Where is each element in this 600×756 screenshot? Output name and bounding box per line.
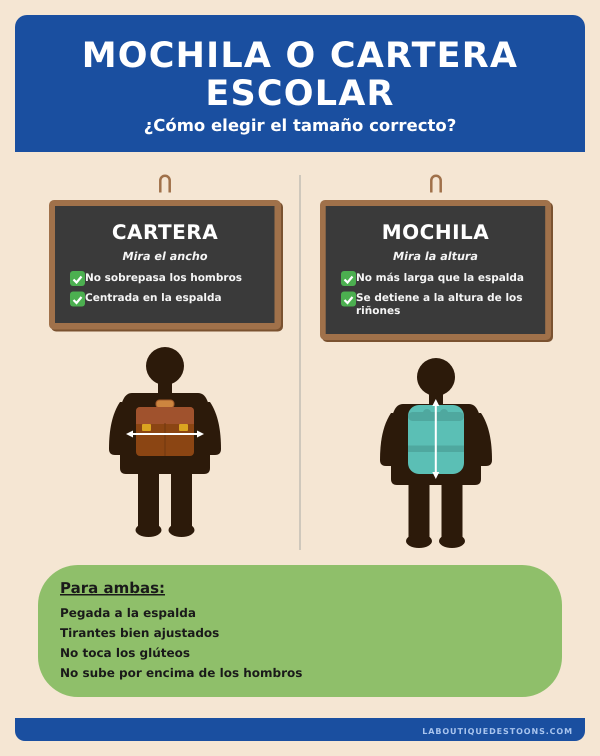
board heading: MOCHILA <box>382 220 489 244</box>
chalkboard: cartera <box>49 200 283 332</box>
checklist item: No sobrepasa los hombros <box>85 272 242 284</box>
icon: board hook <box>160 176 170 192</box>
footer credit: LABOUTIQUEDESTOONS.COM <box>422 727 573 736</box>
chalkboard: mochila <box>320 200 553 342</box>
icon: briefcase <box>136 400 194 456</box>
checklist item: riñones <box>356 305 400 317</box>
figure with backpack <box>380 358 492 548</box>
checklist item <box>341 292 523 317</box>
panel: mochila <box>320 176 553 548</box>
arrow: width <box>126 430 204 438</box>
board subheading: Mira el ancho <box>122 250 208 263</box>
title: ESCOLAR <box>205 74 395 114</box>
list of tips: Tirantes bien ajustados <box>60 626 219 640</box>
checklist item: Se detiene a la altura de los <box>356 292 523 304</box>
panel: cartera <box>49 176 283 537</box>
board heading: CARTERA <box>112 220 218 244</box>
list of tips: No sube por encima de los hombros <box>60 666 302 680</box>
board subheading: Mira la altura <box>393 250 478 263</box>
panel heading: Para ambas: <box>60 579 165 597</box>
arrow: height <box>432 399 439 479</box>
figure with briefcase <box>109 347 221 537</box>
list of tips: Pegada a la espalda <box>60 606 196 620</box>
subtitle: ¿Cómo elegir el tamaño correcto? <box>144 116 456 135</box>
list of tips: No toca los glúteos <box>60 646 190 660</box>
list of tips <box>60 606 302 680</box>
title: MOCHILA O CARTERA <box>82 36 518 76</box>
footer bar <box>15 718 585 741</box>
panel: para ambas <box>38 565 562 697</box>
title <box>82 36 518 114</box>
icon: backpack <box>408 405 464 474</box>
checklist item: Centrada en la espalda <box>85 292 222 304</box>
checklist item: No más larga que la espalda <box>356 272 524 284</box>
icon: board hook <box>431 176 441 192</box>
header banner <box>15 15 585 152</box>
